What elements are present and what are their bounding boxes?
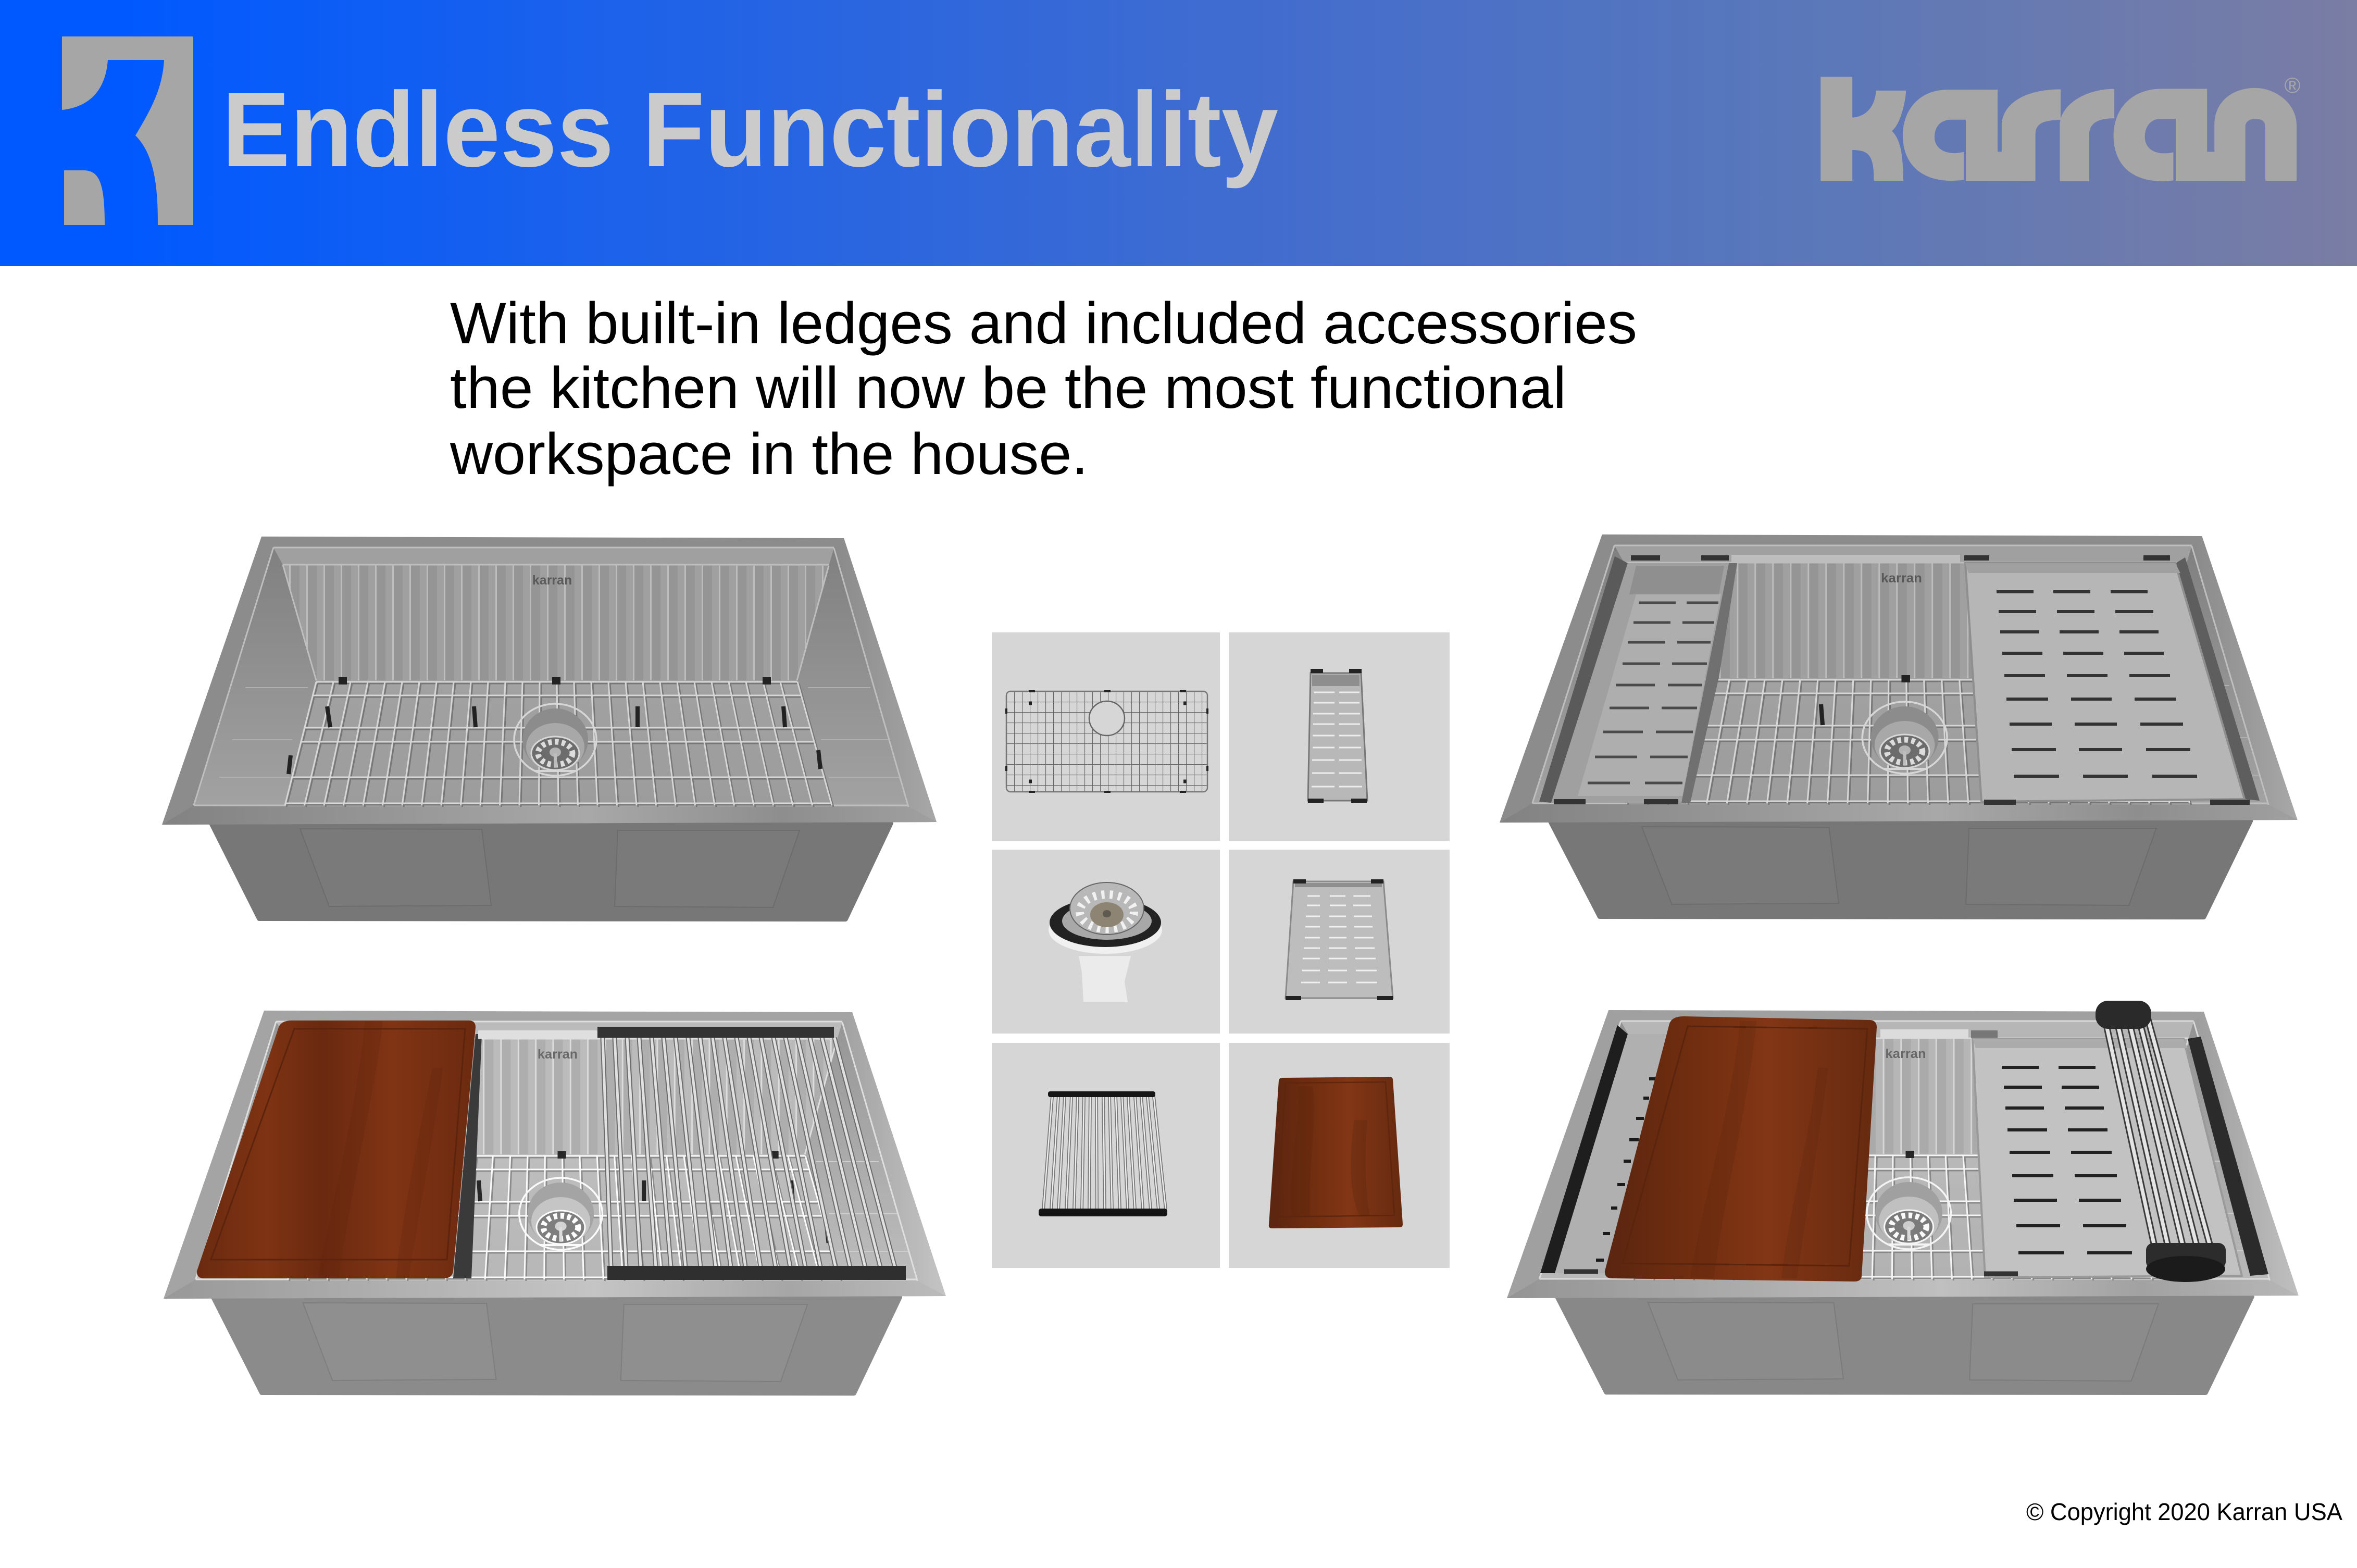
- sink: top right, colander and drain tray: [1500, 534, 2298, 917]
- intro text: workspace in the house.: [450, 421, 1088, 487]
- accessory panel: strainer: [992, 850, 1220, 1034]
- drain tray in sink: [1965, 563, 2244, 802]
- title: Endless Functionality: [222, 70, 1278, 189]
- colander in sink: [1551, 563, 1729, 803]
- rolled drying mat: [2096, 1001, 2226, 1282]
- roll-up drying mat in sink: [597, 1027, 906, 1280]
- cutting board in sink: [1605, 1016, 1877, 1281]
- intro text: the kitchen will now be the most functional: [450, 355, 1566, 420]
- colander partly hidden: [1555, 1034, 1682, 1273]
- intro text: With built-in ledges and included accessories: [450, 291, 1637, 356]
- sink: top left, bare with wire rack: [162, 537, 937, 919]
- logo mark: stylised K: [62, 36, 193, 225]
- accessory panel: cutting board: [1229, 1043, 1450, 1268]
- intro text: [450, 291, 1637, 487]
- copyright note: © Copyright 2020 Karran USA: [2026, 1498, 2342, 1525]
- accessory panel: roll-up mat: [992, 1043, 1220, 1268]
- sink: bottom left, cutting board and roll-up mat: [164, 1011, 946, 1393]
- accessory panel: colander: [1229, 632, 1450, 841]
- cutting board in sink: [197, 1021, 476, 1278]
- accessory panel: bottom grid: [992, 632, 1220, 841]
- accessory panel: drain tray: [1229, 850, 1450, 1034]
- sink: bottom right, board, tray and rolled mat: [1507, 1001, 2299, 1392]
- header banner: [0, 0, 2357, 266]
- brand logo: karran: ®: [2285, 73, 2301, 97]
- brand logo: karran: [1820, 73, 2301, 181]
- drain tray in sink: [1973, 1039, 2242, 1277]
